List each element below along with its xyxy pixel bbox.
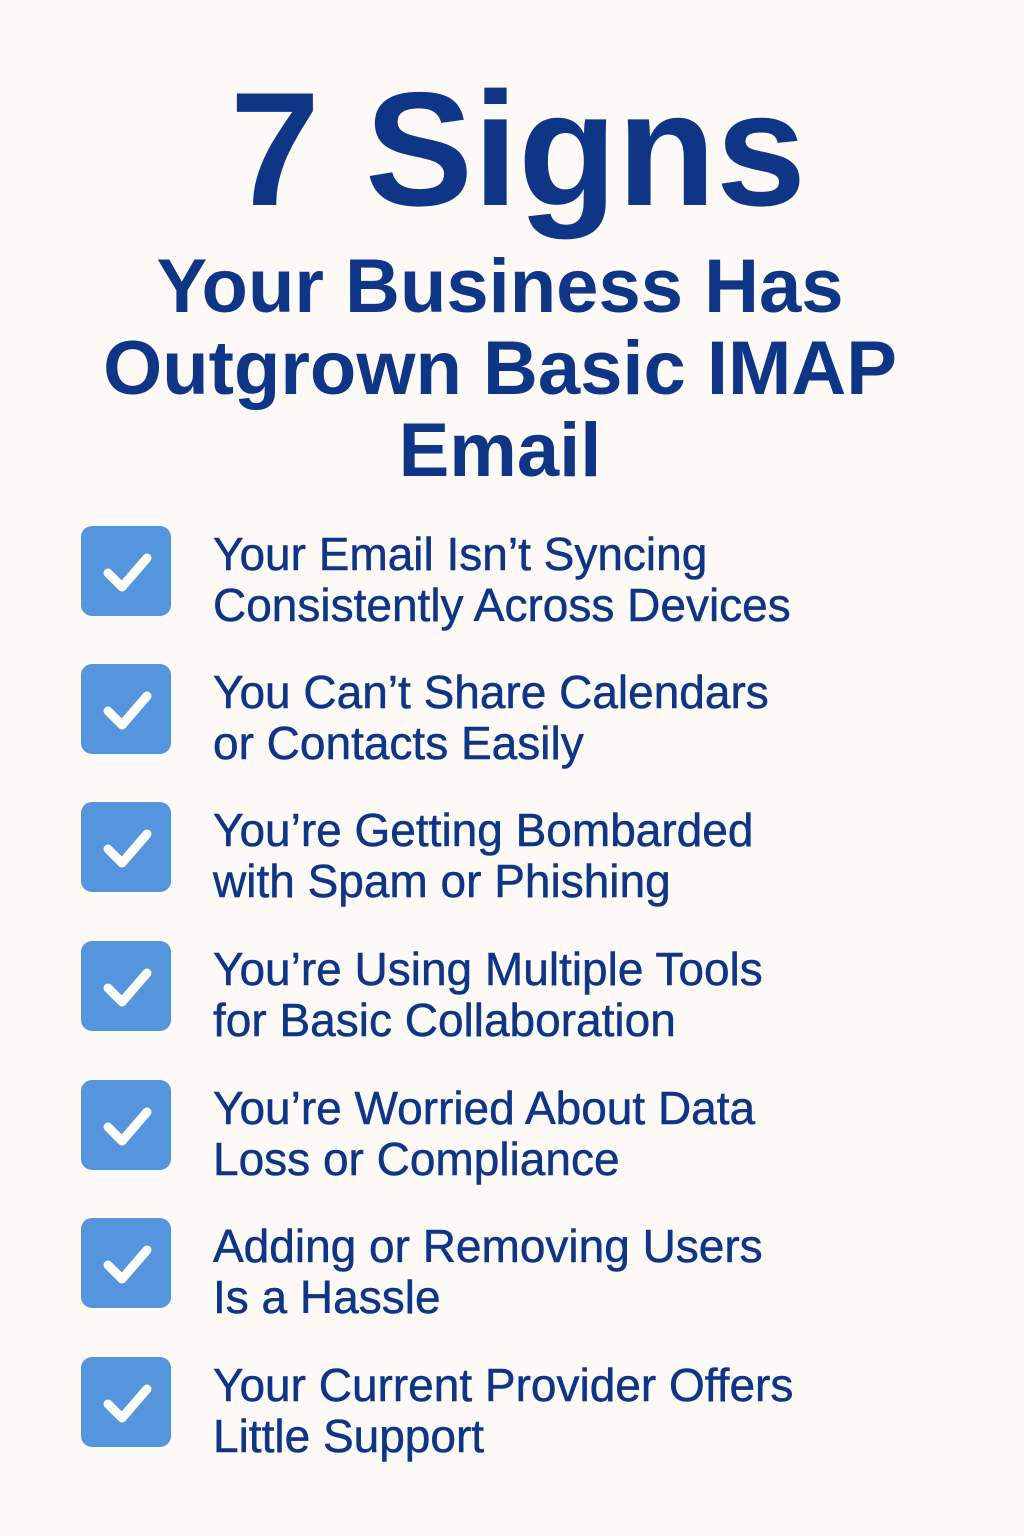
item 4 <box>81 941 763 1046</box>
subtitle: Outgrown Basic IMAP <box>103 326 897 411</box>
item 7: Little Support <box>213 1410 484 1462</box>
item 6 <box>81 1218 763 1323</box>
item 5: Loss or Compliance <box>213 1133 620 1185</box>
item 3: with Spam or Phishing <box>213 855 671 907</box>
item 7: Your Current Provider Offers <box>213 1359 793 1411</box>
item 1: Consistently Across Devices <box>213 579 791 631</box>
item 1 <box>81 526 791 631</box>
item 5: You’re Worried About Data <box>213 1082 755 1134</box>
item 6: Is a Hassle <box>213 1271 441 1323</box>
title: 7 Signs <box>230 59 806 240</box>
item 3: You’re Getting Bombarded <box>213 804 753 856</box>
item 2 <box>81 664 769 769</box>
subtitle: Your Business Has <box>156 244 844 329</box>
item 2: You Can’t Share Calendars <box>213 666 769 718</box>
subtitle <box>103 244 897 493</box>
item 4: You’re Using Multiple Tools <box>213 943 763 995</box>
item 1: Your Email Isn’t Syncing <box>213 528 707 580</box>
item 5 <box>81 1080 756 1185</box>
item 4: for Basic Collaboration <box>213 994 676 1046</box>
subtitle: Email <box>399 408 601 493</box>
item 7 <box>81 1357 793 1462</box>
item 6: Adding or Removing Users <box>213 1220 763 1272</box>
item 3 <box>81 802 753 907</box>
item 2: or Contacts Easily <box>213 717 584 769</box>
